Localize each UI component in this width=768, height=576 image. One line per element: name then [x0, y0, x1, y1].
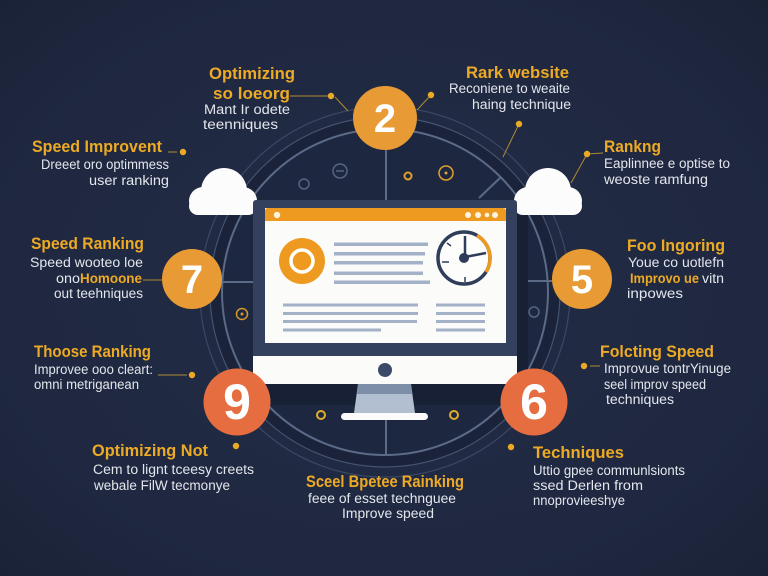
label: ranking: weoste ramfung [603, 172, 708, 187]
label: folcting speed: techniques [606, 392, 674, 407]
label: rark website: Reconiene to weaite [449, 81, 570, 96]
icon: left cloud [189, 168, 257, 215]
home button [378, 363, 392, 377]
monitor shadow [253, 200, 528, 405]
label: rark website [449, 64, 571, 112]
label: techniques: Uttio gpee communlsionts [533, 463, 685, 478]
label: rark website: haing technique [472, 97, 571, 112]
label: speed ranking: Homoone [80, 271, 142, 286]
label: sceel bpetee rainking [306, 473, 464, 521]
label: folcting speed [600, 343, 731, 407]
badge 6 [500, 368, 568, 436]
badge 5: 5 [571, 258, 593, 302]
label: speed ranking: ono [56, 271, 80, 286]
badge 6: 6 [520, 374, 548, 430]
label: sceel bpetee rainking: feee of esset technguee [308, 491, 456, 506]
label: techniques: nnoprovieeshye [533, 493, 625, 508]
label: techniques [533, 444, 685, 508]
badge 7: 7 [181, 258, 203, 302]
label: speed improvent: Speed Improvent [32, 138, 162, 156]
label: foo ingoring: Foo Ingoring [627, 237, 725, 255]
text lines top [334, 242, 430, 284]
monitor [253, 200, 517, 384]
text lines bottom [283, 304, 485, 332]
label: optimizing not [92, 442, 254, 493]
label: speed ranking: Speed wooteo loe [30, 255, 143, 270]
label: optimizing top: Optimizing [209, 65, 295, 83]
badge 2 [353, 86, 417, 150]
label: foo ingoring: inpowes [627, 286, 683, 301]
label: speed improvent: user ranking [89, 173, 169, 188]
label: foo ingoring: Youe co uotlefn [628, 255, 724, 270]
icon: clock [438, 232, 490, 284]
label: optimizing top: teenniques [203, 117, 278, 132]
label: optimizing not: Cem to lignt tceesy creets [93, 462, 254, 477]
label: foo ingoring: Improvo ue [630, 271, 699, 286]
label: speed ranking [30, 235, 144, 301]
label: thoose ranking: Improvee ooo cleart: [34, 362, 153, 377]
icon: right cloud [514, 168, 582, 215]
label: rark website: Rark website [466, 64, 569, 82]
label: speed improvent [32, 138, 169, 188]
label: sceel bpetee rainking: Sceel Bpetee Rainking [306, 473, 464, 491]
label: optimizing top [203, 65, 295, 132]
label: thoose ranking [34, 343, 153, 392]
label: folcting speed: Improvue tontrYinuge [604, 361, 731, 376]
screen [265, 208, 506, 343]
badge 5 [552, 249, 612, 309]
label: folcting speed: Folcting Speed [600, 343, 714, 361]
label: techniques: Techniques [533, 444, 624, 462]
icon: logo circle [279, 238, 325, 284]
label: ranking: Eaplinnee e optise to [604, 156, 730, 171]
label: techniques: ssed Derlen from [533, 478, 643, 493]
label: speed improvent: Dreeet oro optimmess [41, 157, 169, 172]
leader lines and dots [143, 92, 603, 450]
label: thoose ranking: omni metriganean [34, 377, 139, 392]
small orbit markers [236, 164, 539, 419]
label: ranking: Rankng [604, 138, 661, 156]
badge 9 [204, 368, 270, 436]
monitor stand [341, 384, 428, 420]
label: folcting speed: seel improv speed [604, 377, 706, 392]
label: optimizing not: Optimizing Not [92, 442, 208, 460]
label: foo ingoring [627, 237, 725, 301]
label: optimizing not: webale FilW tecmonye [93, 478, 230, 493]
title bar [265, 208, 506, 221]
orbit rings [200, 107, 570, 477]
label: optimizing top: Mant Ir odete [204, 102, 290, 117]
label: speed ranking: out teehniques [54, 286, 143, 301]
badge 9: 9 [223, 374, 251, 430]
label: optimizing top: so loeorg [213, 85, 290, 103]
label: thoose ranking: Thoose Ranking [34, 343, 151, 361]
badge 7 [162, 249, 222, 309]
label: speed ranking: Speed Ranking [31, 235, 144, 253]
badge 2: 2 [374, 97, 396, 141]
label: foo ingoring: vitn [702, 271, 724, 286]
label: ranking [603, 138, 730, 187]
label: sceel bpetee rainking: Improve speed [342, 506, 434, 521]
